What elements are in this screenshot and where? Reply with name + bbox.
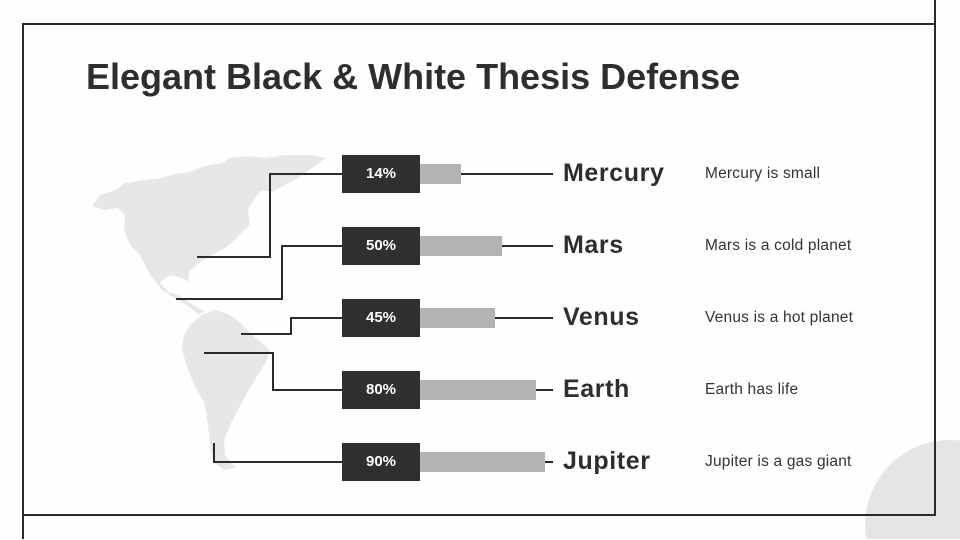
row: Earth: [342, 371, 798, 409]
connector lines: [176, 174, 342, 462]
decorative circle: [865, 440, 960, 539]
row: Jupiter: Jupiter: [563, 447, 651, 475]
row: Mercury: Mercury is small: [705, 165, 820, 182]
row: Jupiter: [342, 443, 852, 481]
row: Jupiter: 90%: [366, 453, 396, 470]
row: Venus: Venus: [563, 303, 640, 331]
map and connectors: [92, 155, 342, 470]
row: Earth: 80%: [366, 381, 396, 398]
row: Mercury: Mercury: [563, 159, 664, 187]
row: Mercury: 14%: [366, 165, 396, 182]
row: Venus: [342, 299, 853, 337]
row: Mars: 50%: [366, 237, 396, 254]
map: americas: [92, 155, 326, 470]
row: Earth: Earth has life: [705, 381, 798, 398]
title: Elegant Black & White Thesis Defense: [86, 56, 740, 97]
row: Venus: 45%: [366, 309, 396, 326]
row: Mercury: [342, 155, 820, 193]
row: Jupiter: Jupiter is a gas giant: [705, 453, 852, 470]
row: Earth: Earth: [563, 375, 630, 403]
row: Venus: Venus is a hot planet: [705, 309, 853, 326]
row: Mars: Mars is a cold planet: [705, 237, 851, 254]
row: Mars: [342, 227, 852, 265]
row: Mars: Mars: [563, 231, 624, 259]
